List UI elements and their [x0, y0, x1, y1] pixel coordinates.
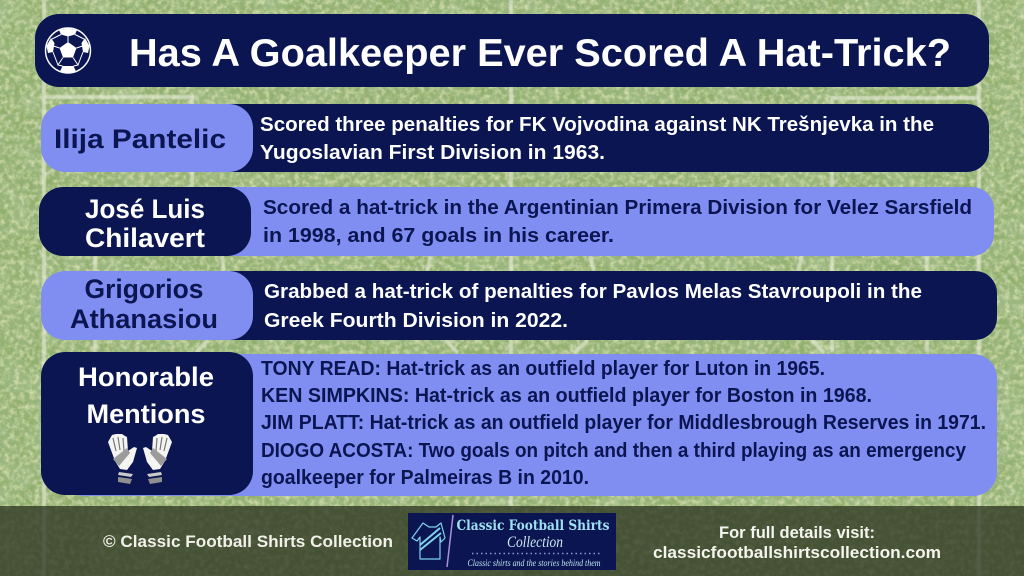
- logo: [408, 513, 616, 570]
- name: [85, 194, 205, 253]
- name: Ilija Pantelic: [54, 124, 226, 154]
- panel: Ilija Pantelic: [41, 104, 989, 172]
- name: Grigorios: [84, 274, 204, 304]
- footer link text: For full details visit:: [719, 523, 875, 542]
- list of mentions: KEN SIMPKINS: Hat-trick as an outfield player for Boston in 1968.: [261, 385, 872, 407]
- name label: [41, 104, 253, 172]
- list of mentions: JIM PLATT: Hat-trick as an outfield player for Middlesbrough Reserves in 1971.: [261, 412, 986, 434]
- name label: [39, 187, 251, 256]
- footer link text: [653, 523, 941, 562]
- title bar: [35, 14, 989, 87]
- name: [70, 274, 218, 334]
- heading: Honorable: [78, 362, 214, 392]
- title text: Has A Goalkeeper Ever Scored A Hat-Trick?: [129, 32, 951, 75]
- panel: Honorable Mentions: [41, 352, 997, 496]
- footer link text: classicfootballshirtscollection.com: [653, 543, 941, 562]
- name label: [41, 271, 253, 340]
- description: [260, 113, 934, 164]
- name: José Luis: [85, 194, 205, 224]
- heading: [78, 362, 214, 429]
- copyright text: © Classic Football Shirts Collection: [103, 532, 393, 551]
- icon: goalkeeper gloves: [108, 434, 172, 484]
- panel: Grigorios Athanasiou: [41, 271, 997, 340]
- name: Chilavert: [85, 223, 205, 253]
- logo dots: [472, 552, 600, 554]
- description: Yugoslavian First Division in 1963.: [260, 141, 605, 164]
- description: Greek Fourth Division in 2022.: [264, 309, 568, 332]
- description: [263, 196, 972, 247]
- name: Athanasiou: [70, 304, 218, 334]
- icon: football: [46, 28, 90, 73]
- description: Scored three penalties for FK Vojvodina against NK Trešnjevka in the: [260, 113, 934, 136]
- shirt stripes: [420, 528, 441, 550]
- list of mentions: [261, 358, 986, 489]
- panel: José Luis Chilavert: [39, 187, 994, 256]
- divider: [447, 515, 453, 567]
- heading: Mentions: [86, 399, 206, 429]
- logo tagline: Classic shirts and the stories behind them: [468, 558, 601, 568]
- name label: [41, 352, 253, 495]
- description: Grabbed a hat-trick of penalties for Pavlos Melas Stavroupoli in the: [264, 280, 922, 303]
- footer band: [0, 506, 1024, 576]
- icon: shirt: [412, 523, 445, 559]
- description: in 1998, and 67 goals in his career.: [263, 224, 614, 247]
- logo name: Classic Football Shirts: [456, 518, 610, 534]
- description: Scored a hat-trick in the Argentinian Primera Division for Velez Sarsfield: [263, 196, 972, 219]
- list of mentions: TONY READ: Hat-trick as an outfield player for Luton in 1965.: [261, 358, 825, 380]
- logo collection word: Collection: [507, 534, 563, 551]
- list of mentions: goalkeeper for Palmeiras B in 2010.: [261, 467, 589, 489]
- list of mentions: DIOGO ACOSTA: Two goals on pitch and then a third playing as an emergency: [261, 440, 967, 462]
- description: [264, 280, 922, 332]
